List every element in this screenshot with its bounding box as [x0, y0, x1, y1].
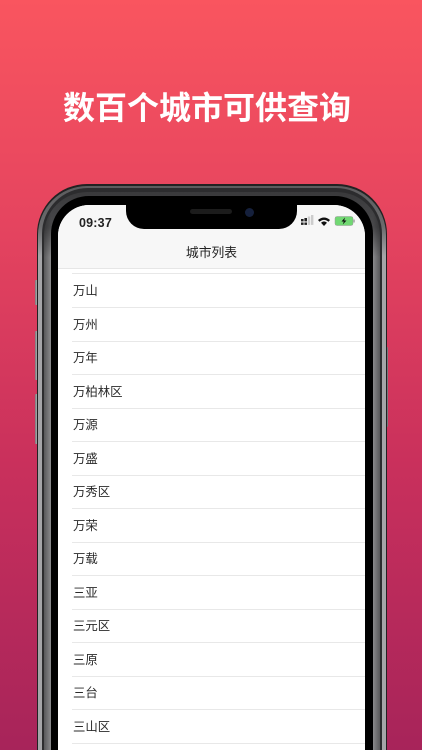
- frame ring: highlight: [38, 186, 386, 750]
- phone mockup: [37, 184, 387, 750]
- icon: wifi: [318, 218, 330, 226]
- row: [72, 609, 366, 643]
- nav title: 城市列表: [186, 245, 237, 260]
- frame ring: grey: [44, 192, 380, 750]
- speaker: [190, 209, 232, 214]
- row: [72, 408, 366, 442]
- icon: battery: [335, 216, 355, 226]
- row: 万年: [73, 351, 98, 365]
- row: [72, 341, 366, 375]
- row: 万盛: [73, 452, 98, 466]
- frame ring: black bezel: [51, 196, 373, 750]
- frame ring: dark: [42, 188, 382, 750]
- camera: [245, 208, 254, 217]
- city list: [72, 273, 365, 744]
- row: 万州: [73, 318, 98, 332]
- side button: volume down: [35, 394, 38, 444]
- row: [72, 542, 366, 576]
- row: 万载: [73, 552, 98, 566]
- side button: mute: [35, 280, 38, 305]
- row: 三元区: [73, 619, 110, 633]
- row: [72, 308, 366, 342]
- row: 万源: [73, 418, 98, 432]
- row: [72, 710, 366, 744]
- title: 数百个城市可供查询: [63, 90, 351, 126]
- row: [72, 274, 366, 308]
- row: [72, 642, 366, 676]
- row: [72, 475, 366, 509]
- row: [72, 442, 366, 476]
- row: 三山区: [73, 720, 110, 734]
- row: 三原: [73, 652, 98, 666]
- icon: signal: [301, 215, 313, 225]
- row: 万山: [73, 284, 98, 298]
- notch: [126, 205, 297, 229]
- row: [72, 676, 366, 710]
- row: [72, 508, 366, 542]
- side button: volume up: [35, 331, 38, 380]
- row: 三台: [73, 686, 98, 700]
- list top divider: [72, 273, 365, 274]
- navigation bar: [58, 205, 365, 269]
- row: [72, 576, 366, 610]
- side button: power: [385, 347, 388, 427]
- row: 万荣: [73, 518, 98, 532]
- row: 万柏林区: [73, 384, 123, 398]
- row: 三亚: [73, 586, 98, 600]
- status time: 09:37: [79, 216, 112, 230]
- phone screen: [58, 205, 365, 750]
- row: 万秀区: [73, 485, 110, 499]
- row: [72, 374, 366, 408]
- status icons: [301, 215, 355, 226]
